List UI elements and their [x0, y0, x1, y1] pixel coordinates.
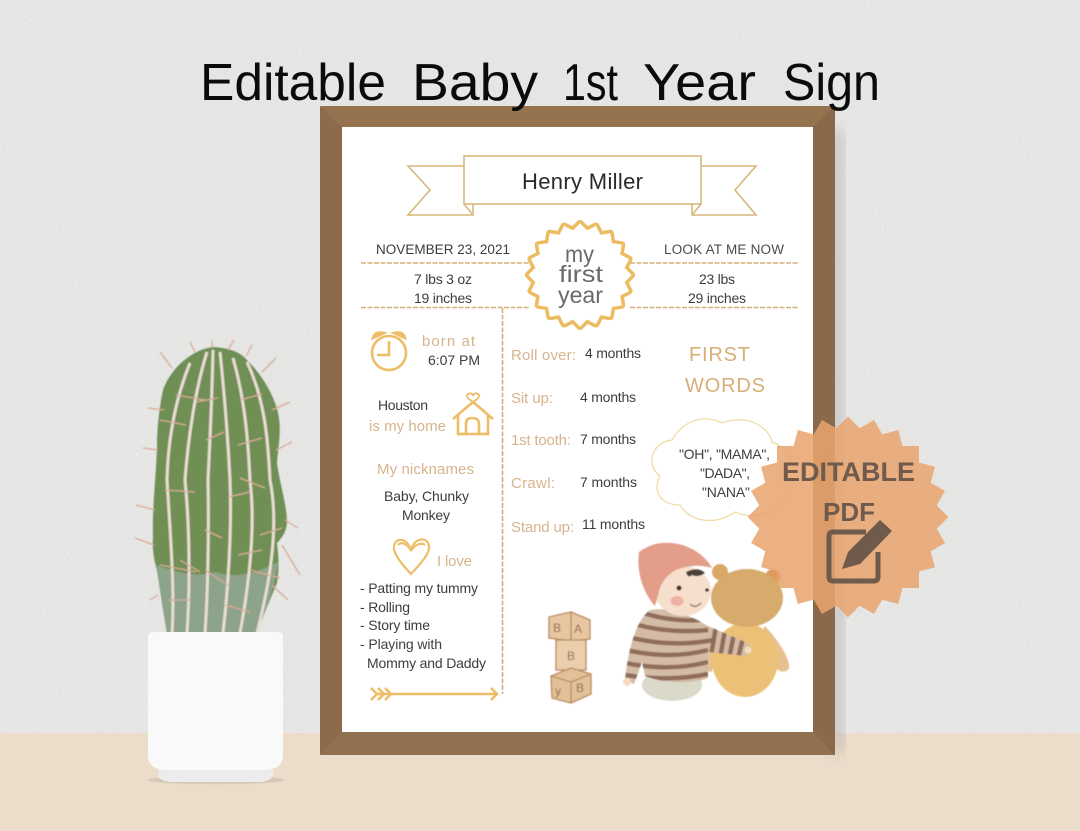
i love heading: I love — [437, 553, 472, 570]
title: Baby — [412, 54, 538, 112]
badge: editable pdf: EDITABLE — [782, 457, 915, 487]
nicknames — [377, 461, 474, 523]
hometown: Houston — [378, 397, 428, 413]
birth stats: 19 inches — [414, 290, 472, 306]
title: Sign — [783, 54, 880, 112]
milestones — [511, 345, 645, 536]
milestones: 4 months — [580, 389, 636, 405]
milestones: Roll over: — [511, 347, 576, 364]
title: Year — [643, 54, 756, 112]
seal: my first year: first — [559, 261, 604, 287]
first words heading: WORDS — [685, 375, 765, 397]
milestones: 7 months — [580, 431, 636, 447]
milestones: Sit up: — [511, 390, 553, 407]
pot shadow — [148, 776, 284, 784]
title — [200, 54, 880, 112]
header right: look at me now: LOOK AT ME NOW — [664, 242, 784, 257]
illustration: baby hugging teddy bear — [620, 543, 789, 701]
baby face — [670, 569, 709, 606]
birth time: 6:07 PM — [428, 352, 480, 368]
header left: birth date: NOVEMBER 23, 2021 — [376, 242, 510, 257]
bear body — [704, 564, 789, 697]
hometown — [369, 397, 446, 435]
icon: alarm clock — [372, 333, 406, 370]
speech cloud — [652, 419, 794, 520]
milestones: Crawl: — [511, 475, 555, 492]
illustration: alphabet blocks: A — [574, 622, 582, 636]
background: wooden shelf — [0, 733, 1080, 831]
badge: editable pdf: PDF — [823, 497, 875, 527]
list of loves — [360, 580, 486, 671]
frame shadow — [826, 130, 844, 752]
speech cloud: "DADA", — [700, 465, 750, 481]
birth time — [422, 333, 480, 368]
illustration: cactus — [135, 340, 300, 633]
list of loves: - Patting my tummy — [360, 580, 478, 596]
illustration: alphabet blocks: B — [553, 621, 561, 635]
dashed divider lines — [361, 263, 799, 694]
birth stats: 7 lbs 3 oz — [414, 271, 472, 287]
title: 1st — [563, 54, 618, 112]
icon: arrow — [371, 688, 497, 700]
name banner: Henry Miller — [522, 169, 643, 194]
baby hat — [638, 543, 712, 606]
current stats: 29 inches — [688, 290, 746, 306]
title: Editable — [200, 54, 386, 112]
nicknames: Monkey — [402, 507, 450, 523]
baby hand — [744, 646, 752, 654]
picture frame — [320, 106, 835, 755]
illustration: white pot — [148, 632, 283, 782]
speech cloud: "OH", "MAMA", — [679, 446, 770, 462]
icon: heart — [394, 539, 429, 574]
icon: house with heart — [453, 393, 493, 434]
baby pants — [642, 669, 702, 701]
badge: editable pdf — [748, 417, 948, 617]
current stats — [688, 271, 746, 306]
seal: my first year: year — [558, 282, 603, 308]
first words heading — [685, 344, 765, 397]
nicknames: Baby, Chunky — [384, 488, 469, 504]
list of loves: - Story time — [360, 617, 430, 633]
seal: my first year: my — [565, 241, 594, 267]
list of loves: - Playing with — [360, 636, 442, 652]
illustration: alphabet blocks — [549, 612, 591, 703]
hometown: is my home — [369, 418, 446, 435]
current stats: 23 lbs — [699, 271, 735, 287]
milestones: 11 months — [582, 516, 645, 532]
baby sweater — [624, 608, 750, 684]
milestones: Stand up: — [511, 519, 574, 536]
first words heading: FIRST — [689, 344, 750, 366]
seal: my first year — [528, 223, 632, 327]
icon: edit pencil — [829, 520, 892, 581]
nicknames: My nicknames — [377, 461, 474, 478]
list of loves: - Rolling — [360, 599, 410, 615]
birth stats — [414, 271, 472, 306]
illustration: alphabet blocks: B — [576, 681, 584, 695]
list of loves: Mommy and Daddy — [367, 655, 486, 671]
milestones: 4 months — [585, 345, 641, 361]
name banner — [408, 156, 756, 215]
baby head — [655, 566, 711, 616]
birth time: born at — [422, 333, 476, 350]
milestones: 7 months — [580, 474, 637, 490]
illustration: alphabet blocks: y — [555, 684, 561, 698]
illustration: alphabet blocks: B — [567, 649, 575, 663]
milestones: 1st tooth: — [511, 432, 571, 449]
speech cloud: "NANA" — [702, 484, 750, 500]
